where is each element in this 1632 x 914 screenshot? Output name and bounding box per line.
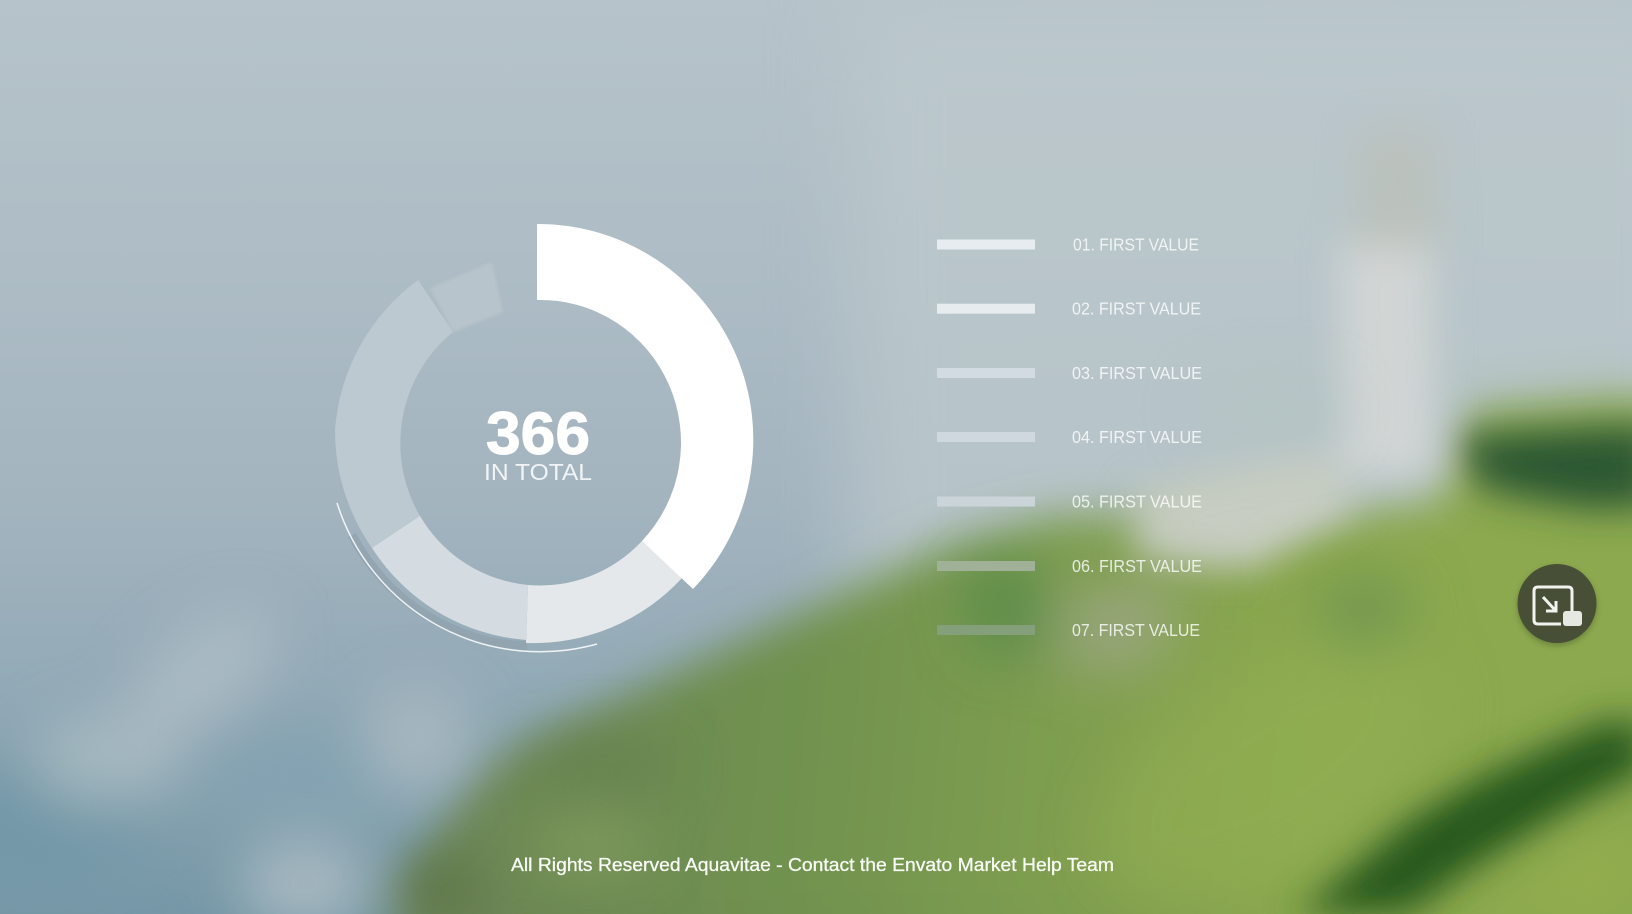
- legend row 5: [937, 492, 1202, 512]
- legend row 2: [937, 299, 1201, 319]
- footer credit: All Rights Reserved Aquavitae - Contact the Envato Market Help Team: [511, 855, 1114, 875]
- legend row 5: 05. FIRST VALUE: [1072, 492, 1202, 512]
- legend row 7: [937, 620, 1200, 640]
- thin outer arc: [337, 503, 597, 652]
- donut chart: [335, 224, 753, 652]
- segment 4: [335, 280, 453, 548]
- shadow band under ring: [352, 535, 527, 646]
- legend: [937, 234, 1202, 640]
- legend row 4: [937, 427, 1202, 447]
- total value: 366: [486, 400, 590, 467]
- legend row 6: [937, 556, 1202, 576]
- legend row 6: 06. FIRST VALUE: [1072, 556, 1202, 576]
- legend row 3: 03. FIRST VALUE: [1072, 363, 1202, 383]
- icon: picture-in-picture button: [1518, 564, 1596, 646]
- legend row 1: 01. FIRST VALUE: [1073, 234, 1199, 254]
- legend row 1: [937, 234, 1199, 254]
- total caption: IN TOTAL: [484, 459, 592, 485]
- legend row 2: 02. FIRST VALUE: [1072, 299, 1201, 319]
- segment 5: faintest: [430, 262, 503, 332]
- legend row 7: 07. FIRST VALUE: [1072, 620, 1200, 640]
- segment 1: largest white: [537, 224, 753, 589]
- legend row 4: 04. FIRST VALUE: [1072, 427, 1202, 447]
- legend row 3: [937, 363, 1202, 383]
- segment 3: [372, 516, 528, 640]
- segment 2: [526, 541, 682, 643]
